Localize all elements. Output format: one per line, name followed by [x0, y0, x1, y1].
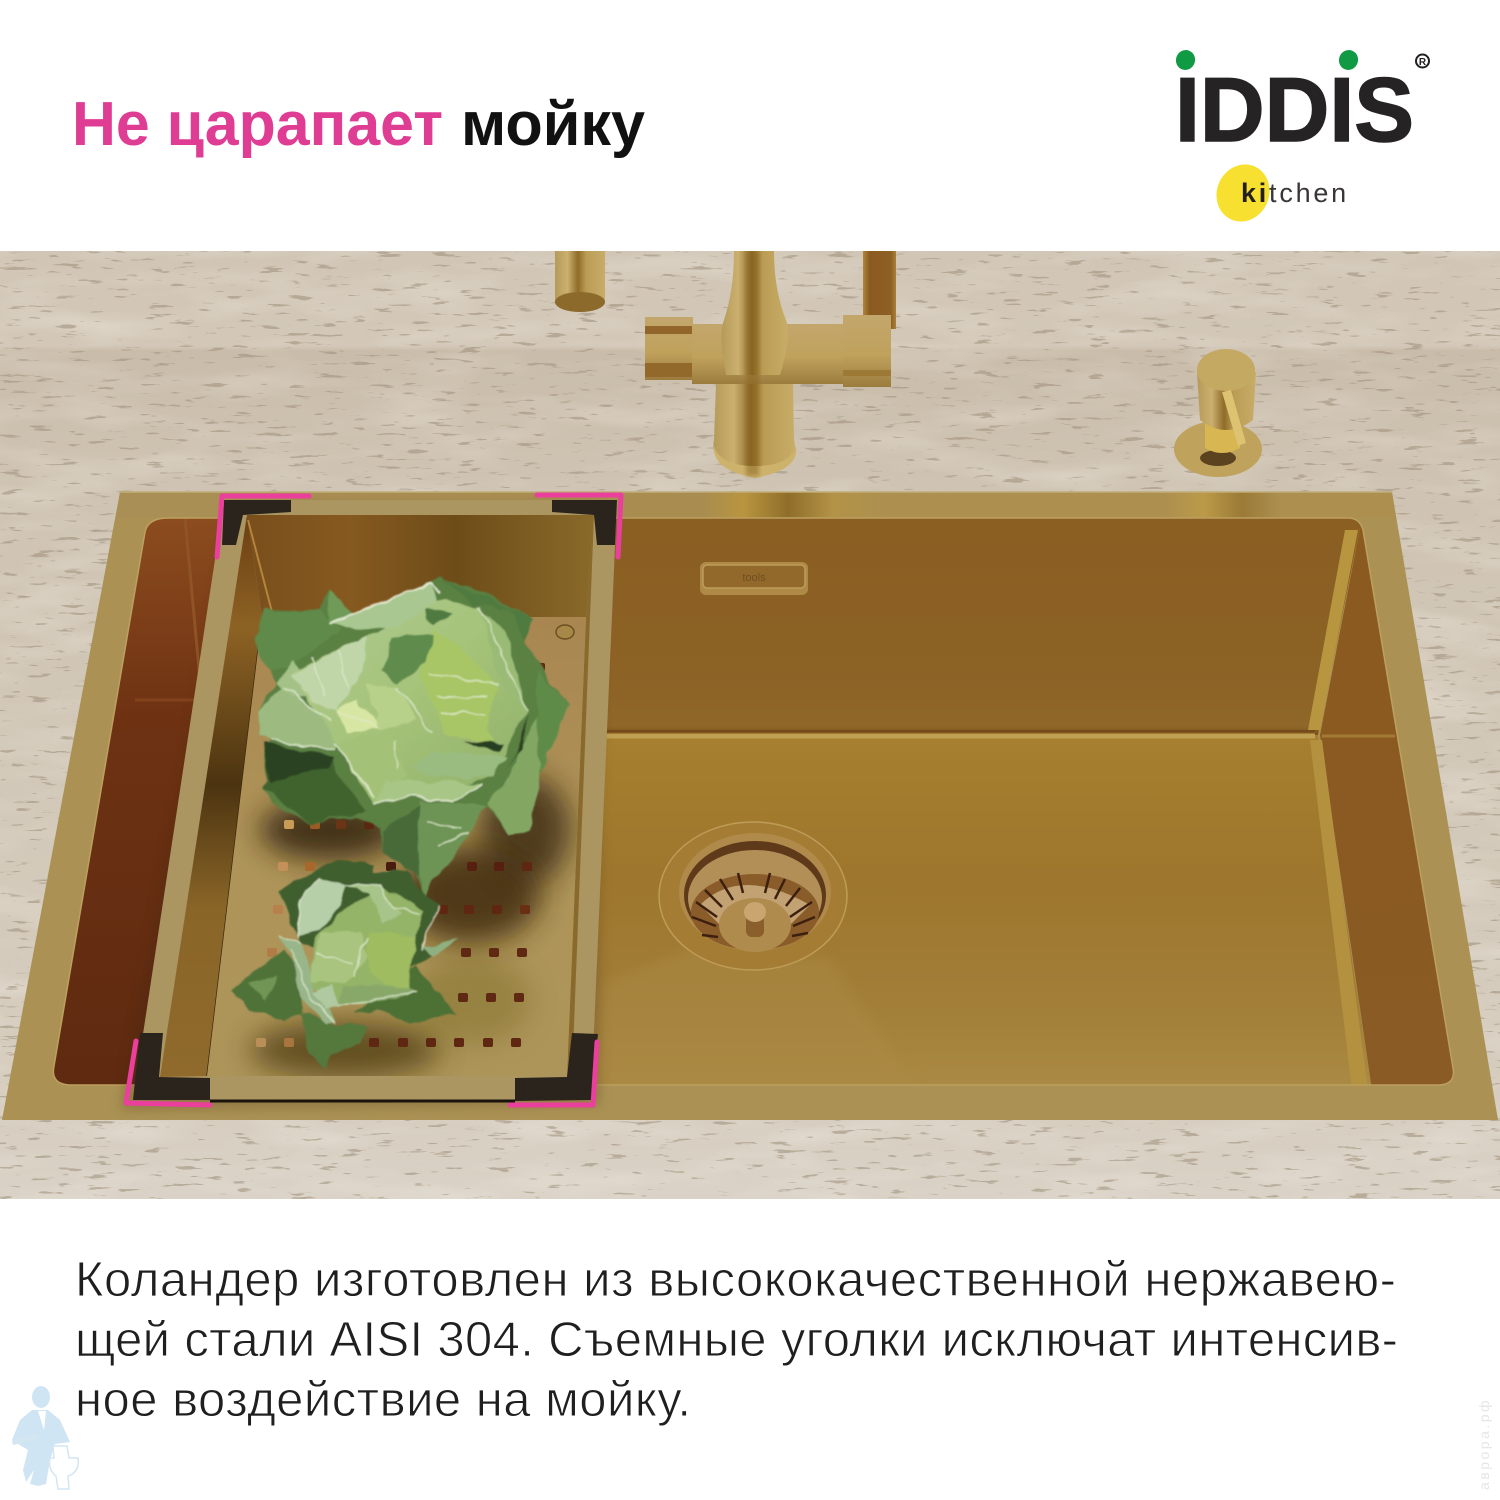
sink rim: [2, 492, 1498, 1120]
description text: ное воздействие на мойку.: [75, 1373, 691, 1427]
colander floor: [207, 617, 586, 1076]
pink corner outlines: [126, 495, 621, 1105]
description text: [75, 1253, 1398, 1427]
colander frame: [133, 500, 617, 1100]
icon: plumber watermark: [12, 1386, 78, 1489]
colander shadow: [119, 856, 604, 1112]
icon: soap dispenser: [1174, 349, 1262, 477]
side watermark: аврора.рф: [1476, 1398, 1492, 1490]
icon: gold faucet: [645, 251, 896, 478]
right wall: [1320, 518, 1460, 1090]
description text: щей стали AISI 304. Съемные уголки исключат интенсив-: [75, 1313, 1398, 1367]
colander left wall: [160, 515, 262, 1077]
description text: Коландер изготовлен из высококачественной нержавею-: [75, 1253, 1396, 1307]
guard: top left: [222, 500, 291, 545]
drain: [659, 822, 847, 970]
guard: top right: [552, 500, 617, 545]
vegetable: large cabbage: [255, 577, 570, 897]
tube on countertop: [555, 251, 605, 312]
vegetable shadows: [250, 775, 570, 1078]
colander drain holes: [256, 625, 574, 1047]
photo: sink with colander: [0, 251, 1500, 1199]
vegetable: small cabbage: [232, 860, 458, 1072]
tools holder: tools: [742, 572, 766, 584]
colander back wall: [247, 515, 594, 617]
tools holder: [700, 562, 808, 595]
rim inner highlight: [53, 518, 1453, 1085]
edge highlights: [605, 734, 1315, 738]
guard: bottom left: [133, 1033, 210, 1100]
back wall: [606, 518, 1360, 735]
title: [72, 90, 646, 159]
logo: iddis kitchen: kitchen: [1241, 178, 1350, 208]
logo: iddis kitchen: [1173, 47, 1429, 230]
stone countertop: [0, 251, 1500, 1199]
logo: iddis kitchen: R: [1419, 57, 1427, 68]
logo: iddis kitchen: IDDIS: [1175, 60, 1414, 161]
colander right wall: [567, 515, 594, 1076]
sink basin: [40, 518, 1460, 1090]
title: мойку: [461, 90, 646, 159]
colander: [133, 500, 617, 1101]
basin floor: [594, 735, 1371, 1084]
removable corner guards: [133, 500, 617, 1101]
title: Не царапает: [72, 90, 443, 159]
left wall: [54, 518, 218, 1084]
guard: bottom right: [515, 1033, 598, 1101]
